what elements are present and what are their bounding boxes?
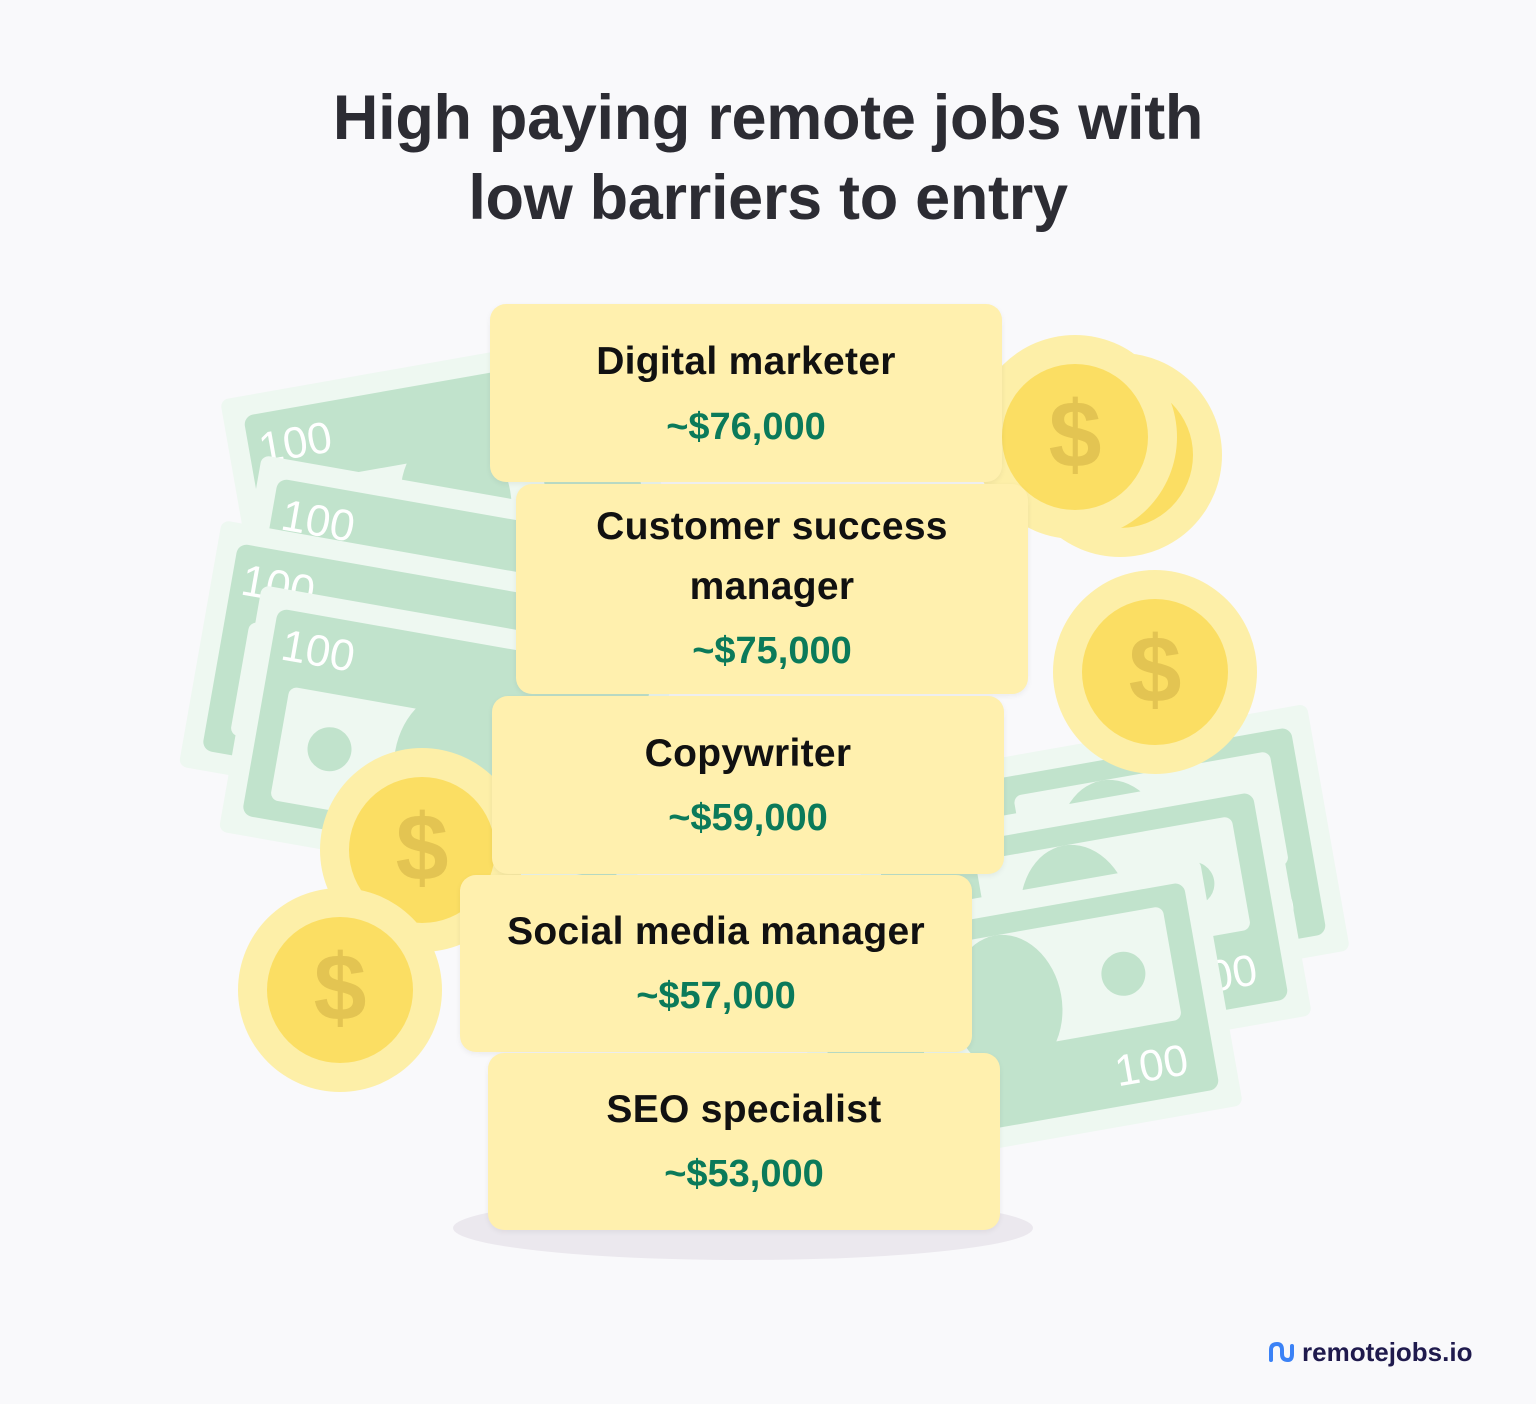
card: customer success manager bbox=[516, 484, 1028, 694]
card: SEO specialist: SEO specialist bbox=[606, 1088, 882, 1131]
bills left: 100 bbox=[278, 491, 358, 552]
bills left: 100 bbox=[255, 413, 336, 474]
bills left bbox=[179, 327, 677, 904]
card: copywriter: ~$59,000 bbox=[668, 797, 828, 839]
card: social media manager bbox=[460, 875, 972, 1052]
logo: remotejobs.io bbox=[1302, 1336, 1472, 1366]
card: SEO specialist: ~$53,000 bbox=[664, 1153, 824, 1195]
bills left: 100 bbox=[238, 556, 318, 617]
card: copywriter: Copywriter bbox=[645, 732, 851, 775]
card: social media manager: Social media manager bbox=[507, 910, 925, 953]
card: SEO specialist bbox=[488, 1053, 1000, 1230]
coins bbox=[238, 335, 1257, 1092]
card: digital marketer: Digital marketer bbox=[596, 340, 896, 383]
card: digital marketer: ~$76,000 bbox=[666, 406, 826, 448]
title: low barriers to entry bbox=[468, 163, 1068, 233]
card: customer success manager: manager bbox=[690, 565, 854, 608]
card: copywriter bbox=[492, 696, 1004, 874]
shadow ellipse bbox=[453, 1196, 1033, 1260]
title bbox=[333, 83, 1203, 233]
card: customer success manager: Customer success bbox=[596, 505, 948, 548]
card: social media manager: ~$57,000 bbox=[636, 975, 796, 1017]
card: customer success manager: ~$75,000 bbox=[692, 630, 852, 672]
bills right: 100 bbox=[1180, 945, 1261, 1006]
bills right: 100 bbox=[1111, 1035, 1192, 1096]
bills right bbox=[786, 704, 1350, 1178]
bills right: 100 bbox=[1218, 880, 1299, 941]
card: digital marketer bbox=[490, 304, 1002, 482]
title: High paying remote jobs with bbox=[333, 83, 1203, 153]
bills left: 100 bbox=[278, 621, 358, 682]
